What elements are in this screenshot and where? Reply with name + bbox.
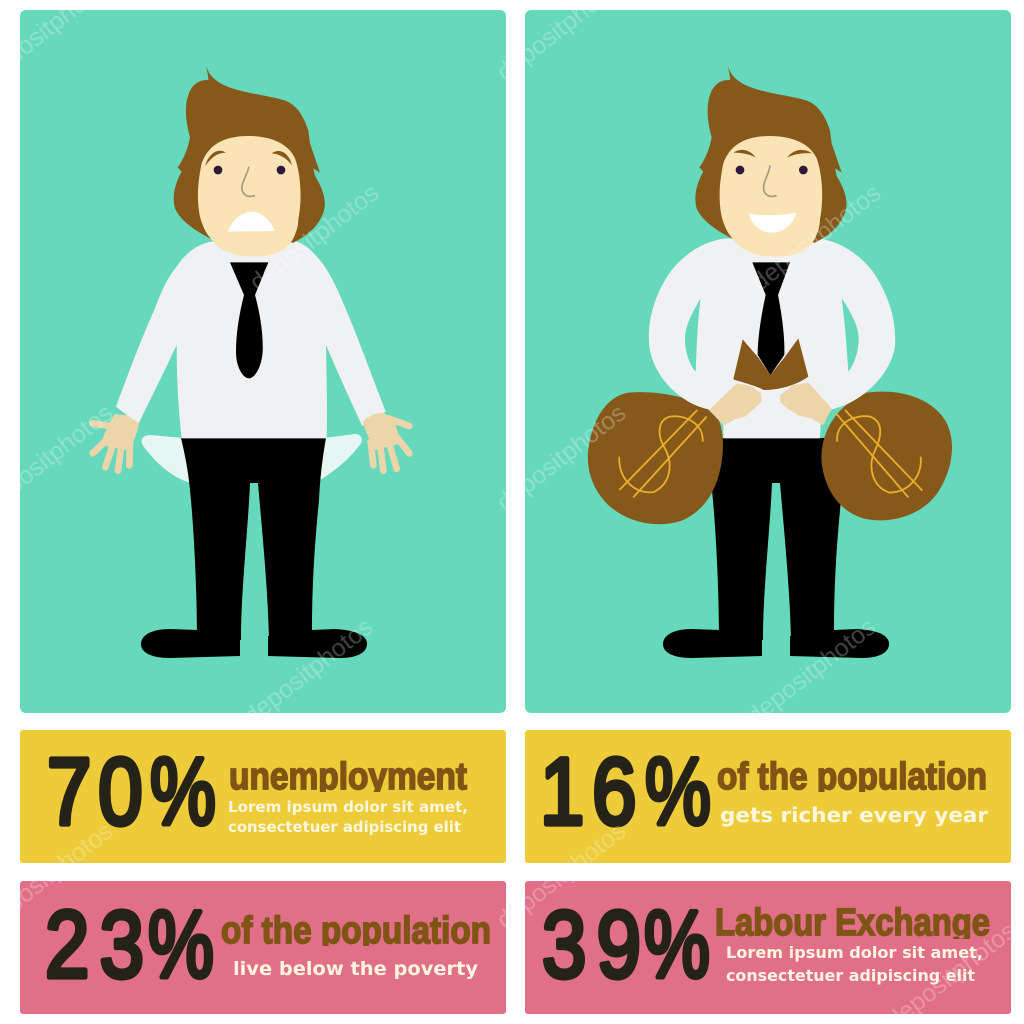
left hand open [93, 414, 139, 471]
hair left [174, 67, 325, 243]
dollar sign right [836, 410, 922, 497]
nose right [764, 166, 776, 196]
eyebrows worried [205, 151, 292, 166]
panel: poor man [20, 10, 506, 713]
stat card: 39% Labour Exchange [525, 881, 1011, 1014]
description lines right [726, 943, 983, 985]
hair right [695, 67, 846, 243]
heading population left: of the population [221, 910, 491, 952]
percentage 16: 16 [540, 738, 636, 845]
card background yellow left [20, 730, 506, 863]
percentage 70: 70 [47, 738, 143, 845]
panel background right [525, 10, 1011, 713]
description lines [228, 798, 468, 836]
shirt right [649, 238, 895, 438]
nose left [242, 167, 254, 196]
stock watermarks: depositphotos [238, 613, 378, 731]
trousers right [703, 438, 848, 640]
description lines right: consectetuer adipiscing elit [726, 966, 975, 985]
money bag left [588, 392, 723, 524]
percentage 23: % [148, 892, 214, 998]
percentage 23: 23 [45, 891, 144, 998]
percentage 16 [540, 738, 711, 845]
stock watermarks: depositphotos [741, 613, 881, 731]
percentage 70 [47, 738, 216, 845]
dollar sign left [619, 410, 707, 497]
hand gripping right [780, 383, 832, 425]
card background pink right [525, 881, 1011, 1014]
face right [720, 136, 822, 257]
card background yellow right [525, 730, 1011, 863]
pockets turned out [142, 434, 362, 483]
stat card: 70% unemployment [20, 730, 506, 863]
percentage 39: % [644, 892, 710, 998]
eyes right [736, 166, 808, 174]
smiling mouth [748, 213, 796, 233]
shoes left [141, 629, 367, 658]
percentage 39 [542, 891, 710, 998]
card background pink left [20, 881, 506, 1014]
description lines right: Lorem ipsum dolor sit amet, [726, 943, 983, 962]
stat card: 16% of the population [525, 730, 1011, 863]
stock watermarks: depositphotos [491, 399, 631, 517]
money bag right [821, 392, 952, 520]
eyes left [214, 166, 285, 174]
description poverty: live below the poverty [233, 958, 479, 980]
trousers left [181, 438, 326, 640]
heading population: of the population [717, 756, 987, 798]
percentage 39: 39 [542, 891, 641, 998]
shoes right [663, 629, 889, 658]
stock watermarks: depositphotos [746, 179, 886, 297]
description lines: Lorem ipsum dolor sit amet, [228, 798, 468, 816]
description lines: consectetuer adipiscing elit [228, 818, 461, 836]
stock watermarks: depositphotos [244, 179, 384, 297]
shirt left [116, 242, 386, 438]
percentage 16: % [645, 739, 711, 845]
tie right [752, 262, 790, 375]
wallet torn open [733, 338, 808, 390]
panel: rich man [525, 10, 1011, 713]
percentage 23 [45, 891, 214, 998]
right hand open [363, 413, 409, 471]
percentage 70: % [150, 739, 216, 845]
panel background left [20, 10, 506, 713]
tie left [230, 262, 268, 378]
hand gripping left [709, 383, 762, 425]
stat card: 23% of the population [20, 881, 506, 1014]
heading unemployment: unemployment [229, 756, 467, 798]
sad mouth [227, 212, 275, 232]
face left [198, 136, 301, 257]
description richer: gets richer every year [720, 803, 988, 827]
stock watermarks: depositphotos [491, 817, 631, 935]
eyebrows confident [733, 150, 812, 157]
